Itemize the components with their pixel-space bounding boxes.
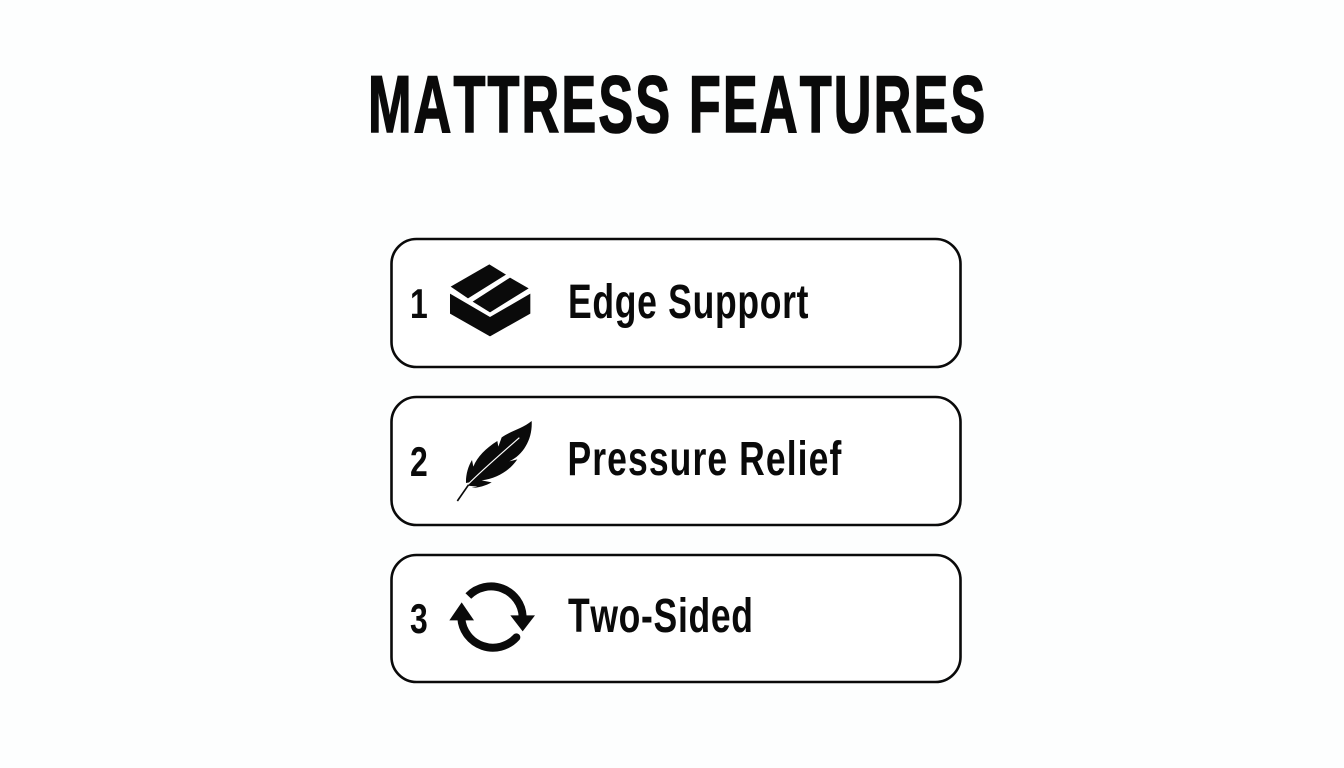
title: MATTRESS FEATURES (368, 60, 985, 150)
card outline 1 (392, 239, 960, 367)
label: Pressure Relief: Pressure Relief (568, 432, 842, 485)
icon: feather (457, 421, 532, 501)
icon: mattress box (450, 264, 530, 336)
number 1: 1 (410, 280, 428, 327)
card outline 2 (392, 397, 960, 525)
panel: two-sided row (392, 555, 960, 682)
icon: rotating arrows (449, 586, 535, 648)
number 3: 3 (410, 595, 428, 642)
label: Two-Sided: Two-Sided (568, 589, 753, 642)
panel: pressure relief row (392, 397, 960, 525)
label: Edge Support: Edge Support (568, 275, 809, 328)
panel: edge support row (392, 239, 960, 367)
number 2: 2 (410, 438, 428, 485)
card outline 3 (392, 555, 960, 682)
